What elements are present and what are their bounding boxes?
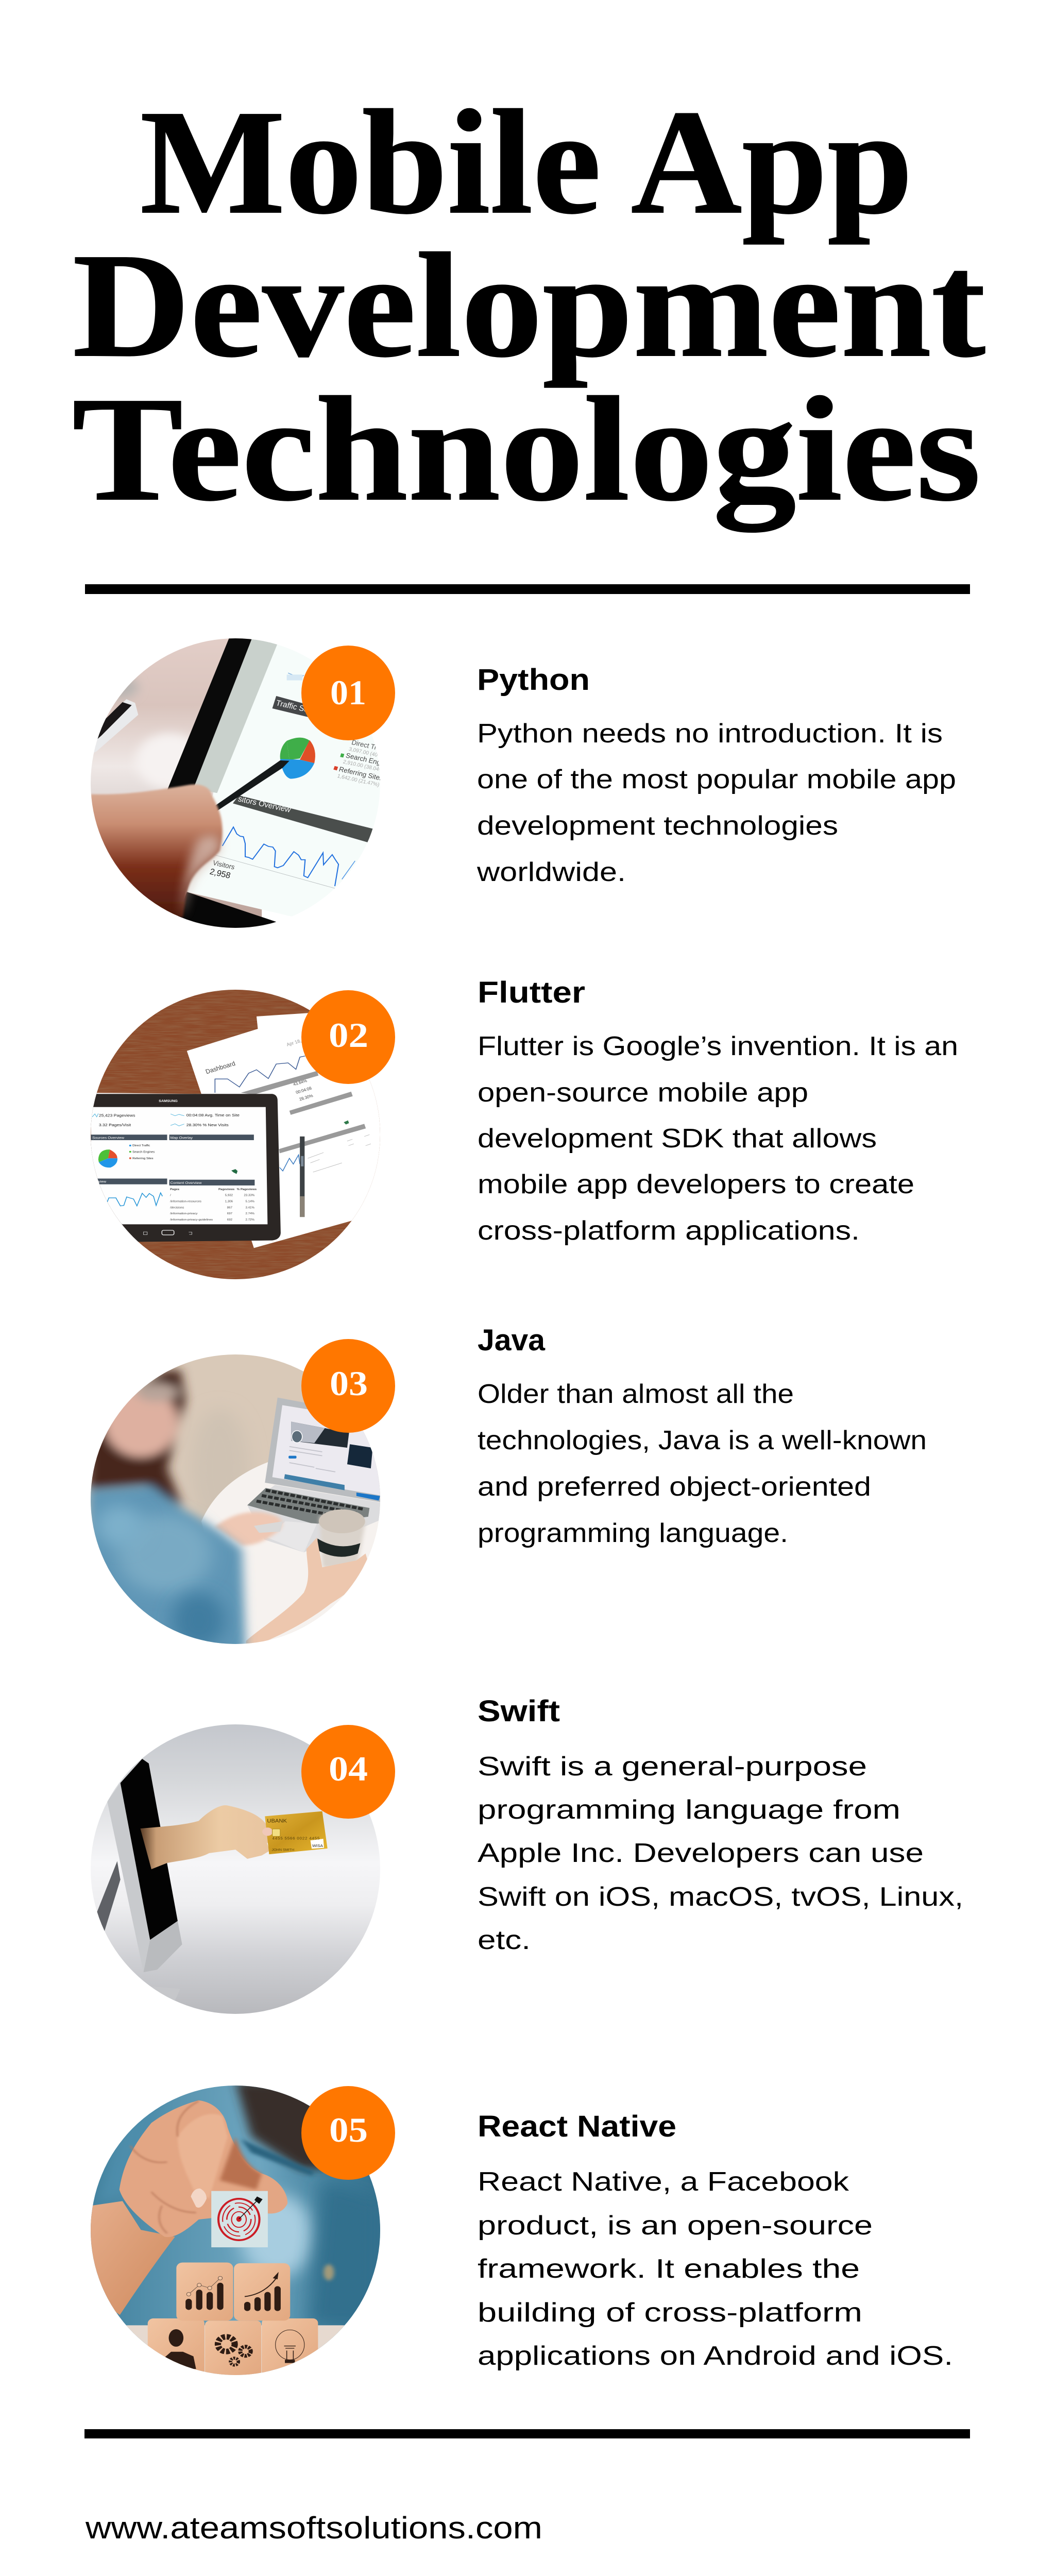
- image: tablet and reports on wooden desk: 28.30%: [299, 1093, 314, 1102]
- image: tablet and reports on wooden desk: Pageviews: [218, 1188, 234, 1191]
- text: Swift description: Swift is a general-purpose: [478, 1752, 867, 1782]
- text: Java description: programming language.: [478, 1518, 788, 1548]
- text: React Native description: product, is an open-source: [478, 2211, 873, 2241]
- text: Swift description: Swift on iOS, macOS, tvOS, Linux,: [478, 1882, 963, 1912]
- badge: 01: 01: [330, 673, 366, 712]
- text: Swift description: programming language from: [478, 1795, 900, 1825]
- text: Python description: one of the most popular mobile app: [477, 765, 956, 794]
- image: hand with credit card reaching out of monitor: WISA: [312, 1843, 324, 1848]
- image: tablet and reports on wooden desk: Dashboard: [205, 1060, 236, 1075]
- text: Python description: [477, 719, 956, 887]
- image: tablet and reports on wooden desk: Referring Sites: [132, 1157, 154, 1160]
- image: hand pointing pen at analytics screen: 1,642.00 (21.47%): [336, 773, 380, 788]
- image: hand with credit card reaching out of monitor: UBANK: [267, 1818, 287, 1824]
- image: tablet and reports on wooden desk: SAMSUNG: [159, 1098, 178, 1103]
- text: Flutter description: [478, 1031, 958, 1246]
- heading: Python: Python: [477, 663, 590, 697]
- footer website: www.ateamsoftsolutions.com: [85, 2511, 542, 2545]
- text: Java description: technologies, Java is a well-known: [478, 1426, 927, 1455]
- text: Flutter description: development SDK that allows: [478, 1124, 877, 1154]
- image: hand pointing pen at analytics screen: Referring Sites: [338, 765, 384, 782]
- image: hand pointing pen at analytics screen: 2,958: [209, 867, 232, 880]
- image: tablet and reports on wooden desk: /information-resources: [170, 1200, 201, 1203]
- image: tablet and reports on wooden desk: 25,423 Pageviews: [99, 1113, 135, 1117]
- text: React Native description: [478, 2167, 953, 2371]
- badge: 02: 02: [329, 1015, 368, 1055]
- image: tablet and reports on wooden desk: Direct Traffic: [132, 1144, 150, 1147]
- text: Java description: [478, 1379, 927, 1548]
- image: hand with credit card reaching out of monitor: [78, 1721, 406, 2018]
- image: tablet and reports on wooden desk: 28.30% % New Visits: [186, 1123, 229, 1127]
- badge: 05: 05: [329, 2110, 368, 2149]
- image: tablet and reports on wooden desk: 867: [227, 1207, 232, 1209]
- item 04: Swift: [78, 1694, 963, 2018]
- image: tablet and reports on wooden desk: 2.74%: [246, 1212, 254, 1215]
- image: hand pointing pen at analytics screen: sitors Overview: [237, 794, 292, 815]
- image: tablet and reports on wooden desk: 692: [227, 1219, 232, 1222]
- image: tablet and reports on wooden desk: [91, 990, 380, 1279]
- image: hand with credit card reaching out of monitor: 4455 5566 0022 4455: [273, 1836, 319, 1840]
- text: Python description: Python needs no introduction. It is: [477, 719, 943, 749]
- image: hand pointing pen at analytics screen: Search Engine: [345, 751, 390, 768]
- text: Python description: development technologies: [477, 811, 838, 841]
- item 01: Python: [78, 630, 956, 940]
- image: tablet and reports on wooden desk: 00:04:08: [295, 1086, 313, 1095]
- badge: 04: 04: [329, 1749, 368, 1788]
- text: Swift description: Apple Inc. Developers can use: [478, 1838, 924, 1868]
- image: hand pointing pen at analytics screen: [91, 638, 380, 928]
- image: tablet and reports on wooden desk: /: [170, 1194, 171, 1197]
- image: tablet and reports on wooden desk: /information-privacy: [170, 1212, 198, 1215]
- item 03: Java: [78, 1324, 927, 1657]
- image: tablet and reports on wooden desk: Map Overlay: [171, 1136, 193, 1140]
- item 05: React Native: [78, 2081, 953, 2383]
- badge: 03: [301, 1339, 395, 1433]
- text: React Native description: building of cross-platform: [478, 2298, 862, 2328]
- image: tablet and reports on wooden desk: 3.32 Pages/Visit: [99, 1123, 131, 1127]
- image: tablet and reports on wooden desk: 3.41%: [246, 1207, 254, 1209]
- badge: 01: [301, 646, 395, 740]
- image: hand pointing pen at analytics screen: Direct Traf: [351, 738, 384, 753]
- image: tablet and reports on wooden desk: 00:04:08 Avg. Time on Site: [186, 1113, 240, 1117]
- badge: 04: [301, 1725, 395, 1819]
- image: hand pointing pen at analytics screen: Visitors: [212, 859, 236, 871]
- text: Swift description: etc.: [478, 1925, 531, 1955]
- image: tablet and reports on wooden desk: Pages: [170, 1188, 179, 1191]
- image: tablet and reports on wooden desk: /decisions: [170, 1207, 184, 1209]
- heading: Flutter: Flutter: [478, 976, 585, 1009]
- image: hand with credit card reaching out of monitor: JOHN SMITH: [272, 1849, 294, 1852]
- image: tablet and reports on wooden desk: Sources Overview: [92, 1136, 125, 1140]
- image: tablet and reports on wooden desk: 43.84%: [293, 1078, 308, 1087]
- image: tablet and reports on wooden desk: 697: [227, 1212, 232, 1215]
- badge: 05: [301, 2086, 395, 2180]
- image: woman with laptop and coffee cup: [91, 1354, 380, 1644]
- text: Java description: and preferred object-oriented: [478, 1472, 871, 1502]
- title: Mobile App: [140, 79, 913, 245]
- heading: React Native: React Native: [478, 2110, 676, 2143]
- badge: 03: 03: [330, 1364, 368, 1403]
- image: tablet and reports on wooden desk: view: [98, 1179, 107, 1183]
- image: tablet and reports on wooden desk: % Pageviews: [237, 1188, 257, 1191]
- image: tablet and reports on wooden desk: Search Engines: [132, 1151, 155, 1154]
- image: tablet and reports on wooden desk: Apr 18, 20: [286, 1036, 308, 1047]
- heading: Java: Java: [478, 1324, 546, 1357]
- text: React Native description: React Native, a Facebook: [478, 2167, 849, 2197]
- text: Swift description: [478, 1752, 963, 1955]
- text: Java description: Older than almost all the: [478, 1379, 794, 1409]
- text: Flutter description: mobile app developers to create: [478, 1170, 914, 1199]
- image: tablet and reports on wooden desk: 5,932: [225, 1194, 233, 1197]
- image: tablet and reports on wooden desk: 1,306: [225, 1200, 233, 1203]
- text: React Native description: applications on Android and iOS.: [478, 2341, 953, 2371]
- title: Development: [73, 223, 987, 388]
- image: tablet and reports on wooden desk: 2.72%: [246, 1219, 254, 1222]
- text: Python description: worldwide.: [477, 857, 626, 887]
- image: hand pointing pen at analytics screen: 2,910.00 (38.04%): [342, 759, 386, 774]
- text: Flutter description: cross-platform applications.: [478, 1216, 860, 1246]
- text: React Native description: framework. It enables the: [478, 2254, 860, 2284]
- title: [72, 79, 987, 534]
- image: tablet and reports on wooden desk: 5.14%: [246, 1200, 254, 1203]
- image: hand pointing pen at analytics screen: 3,097.00 (40: [348, 747, 379, 758]
- image: tablet and reports on wooden desk: /information-privacy-guidelines: [170, 1219, 213, 1222]
- text: Flutter description: open-source mobile app: [478, 1078, 808, 1108]
- image: tablet and reports on wooden desk: Content Overview: [171, 1180, 202, 1185]
- text: Flutter description: Flutter is Google’s invention. It is an: [478, 1031, 958, 1061]
- badge: 02: [301, 990, 395, 1084]
- image: tablet and reports on wooden desk: 23.33%: [244, 1194, 254, 1197]
- image: hand placing target block on wooden blocks: [78, 2081, 406, 2383]
- heading: Swift: Swift: [478, 1694, 560, 1728]
- item 02: Flutter: [78, 976, 958, 1293]
- image: hand pointing pen at analytics screen: Traffic Source: [275, 699, 325, 718]
- title: Technologies: [72, 366, 981, 534]
